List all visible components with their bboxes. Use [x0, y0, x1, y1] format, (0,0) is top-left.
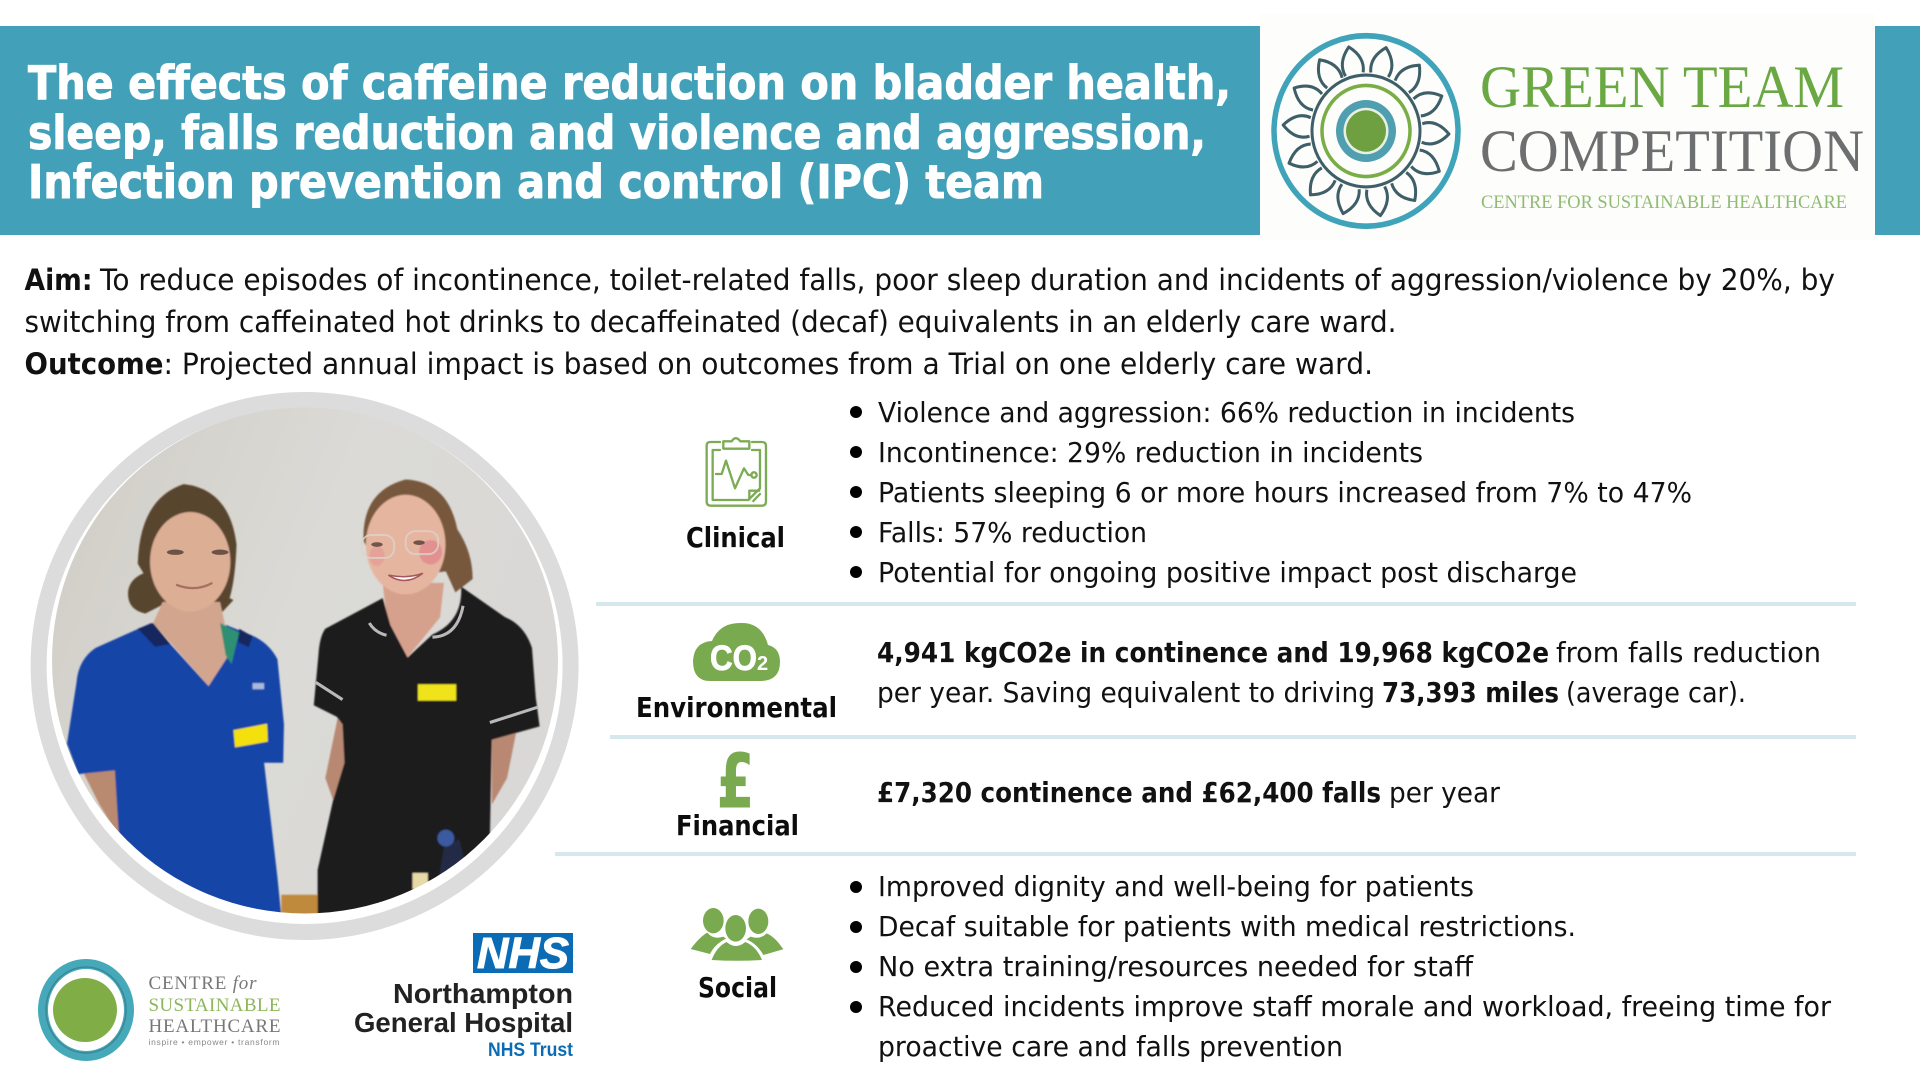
- logo: Green Team Competition: CENTRE FOR SUSTAINABLE HEALTHCARE: [1481, 192, 1847, 213]
- social bullet list: Improved dignity and well-being for patients: [878, 870, 1474, 903]
- panel: clinical: Clinical: [686, 521, 785, 554]
- panel: environmental: [636, 623, 837, 724]
- icon: pound sign: £: [717, 739, 754, 825]
- logo: NHS Northampton General Hospital: NHS: [477, 929, 569, 978]
- title: [28, 56, 1231, 209]
- environmental text: 4,941 kgCO2e in continence and 19,968 kgCO2e: [877, 636, 1549, 669]
- icon: CO2 cloud: 2: [757, 653, 768, 675]
- environmental text: 73,393 miles: [1382, 676, 1559, 709]
- environmental text: [877, 636, 1821, 709]
- panel: financial: Financial: [676, 809, 799, 842]
- photo: two nurses in circular frame: [38, 395, 574, 932]
- logo: Green Team Competition: GREEN TEAM: [1480, 54, 1844, 120]
- clinical bullet list: Potential for ongoing positive impact post discharge: [878, 556, 1577, 589]
- icon: clipboard with pulse: [707, 438, 766, 506]
- social bullet list: proactive care and falls prevention: [878, 1030, 1343, 1063]
- aim and outcome text: To reduce episodes of incontinence, toilet-related falls, poor sleep duration and incidents of aggression/violence by 20%, by: [99, 263, 1835, 297]
- icon: sunflower emblem: [1274, 36, 1458, 226]
- header banner: [0, 26, 1920, 235]
- logo: NHS Northampton General Hospital: NHS Trust: [488, 1040, 574, 1061]
- clinical bullet list: [850, 396, 1692, 589]
- aim and outcome text: Outcome: [24, 347, 164, 381]
- social bullet list: [850, 870, 1831, 1063]
- title: sleep, falls reduction and violence and aggression,: [28, 106, 1206, 160]
- financial text: £7,320 continence and £62,400 falls: [877, 776, 1381, 809]
- panel: financial: [676, 739, 799, 842]
- panel: social: [691, 908, 783, 1004]
- social bullet list: No extra training/resources needed for staff: [878, 950, 1474, 983]
- logo: Centre for Sustainable Healthcare: HEALTHCARE: [148, 1016, 280, 1037]
- icon: CO2 cloud: CO: [710, 639, 757, 678]
- panel: clinical: [686, 438, 785, 554]
- panel: social: Social: [698, 971, 777, 1004]
- aim and outcome text: : Projected annual impact is based on outcomes from a Trial on one elderly care ward.: [164, 347, 1373, 381]
- social bullet list: Decaf suitable for patients with medical restrictions.: [878, 910, 1576, 943]
- logo: Centre for Sustainable Healthcare: [43, 964, 280, 1056]
- icon: group of people: [691, 908, 783, 961]
- aim and outcome text: Aim:: [24, 263, 92, 297]
- logo: Centre for Sustainable Healthcare: SUSTAINABLE: [148, 995, 280, 1016]
- icon: CO2 cloud: [693, 623, 780, 681]
- logo: Green Team Competition: [1260, 14, 1875, 240]
- clinical bullet list: Patients sleeping 6 or more hours increased from 7% to 47%: [878, 476, 1692, 509]
- panel: environmental: Environmental: [636, 691, 837, 724]
- aim and outcome text: [24, 263, 1835, 381]
- environmental text: per year. Saving equivalent to driving: [877, 676, 1375, 709]
- environmental text: (average car).: [1566, 676, 1746, 709]
- title: The effects of caffeine reduction on bladder health,: [28, 56, 1231, 110]
- logo: Green Team Competition: COMPETITION: [1480, 118, 1864, 184]
- financial text: per year: [1389, 776, 1500, 809]
- clinical bullet list: Incontinence: 29% reduction in incidents: [878, 436, 1423, 469]
- logo: NHS Northampton General Hospital: [354, 929, 574, 1061]
- logo: NHS Northampton General Hospital: Northampton: [393, 978, 573, 1009]
- logo: NHS Northampton General Hospital: General Hospital: [354, 1007, 573, 1038]
- environmental text: from falls reduction: [1556, 636, 1821, 669]
- social bullet list: Reduced incidents improve staff morale and workload, freeing time for: [878, 990, 1831, 1023]
- clinical bullet list: Falls: 57% reduction: [878, 516, 1147, 549]
- title: Infection prevention and control (IPC) team: [28, 155, 1044, 209]
- aim and outcome text: switching from caffeinated hot drinks to decaffeinated (decaf) equivalents in an elderly care ward.: [24, 305, 1396, 339]
- logo: Centre for Sustainable Healthcare: inspire • empower • transform: [148, 1037, 280, 1047]
- icon: green circle emblem: [43, 964, 129, 1056]
- clinical bullet list: Violence and aggression: 66% reduction in incidents: [878, 396, 1575, 429]
- logo: Centre for Sustainable Healthcare: CENTRE for: [148, 973, 257, 994]
